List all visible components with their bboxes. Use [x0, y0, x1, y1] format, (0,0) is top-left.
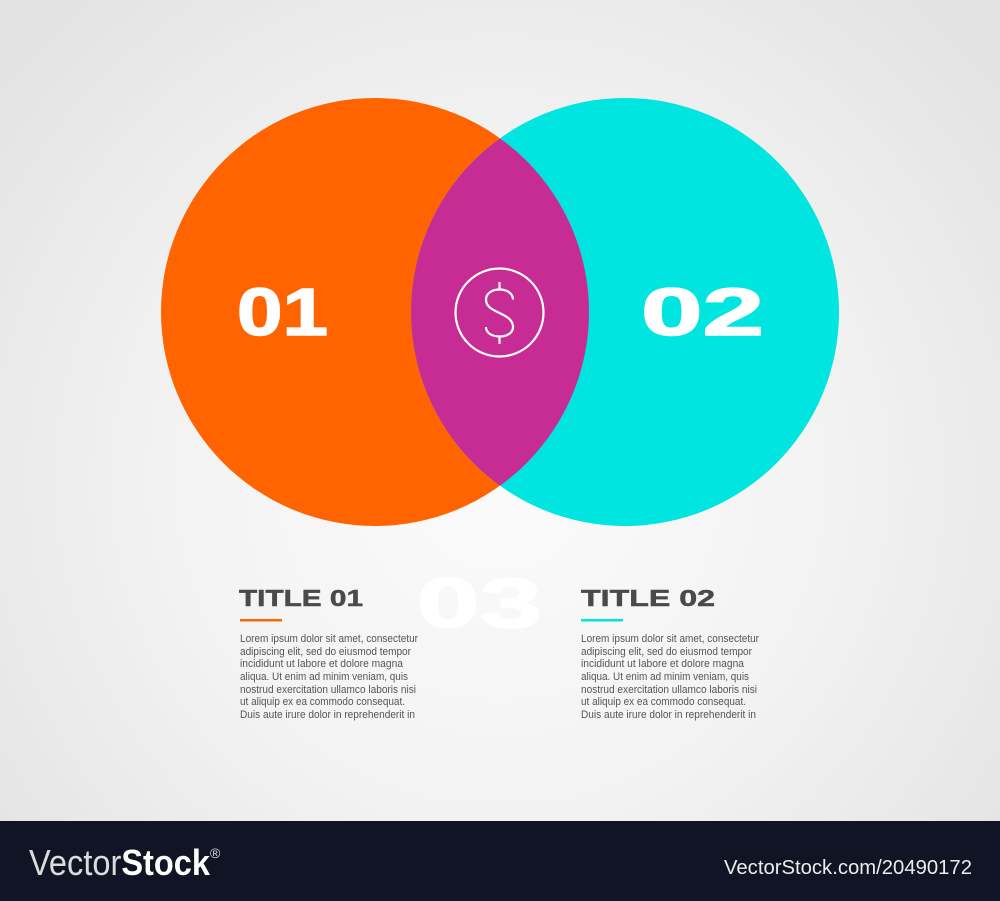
body text 02: Duis aute irure dolor in reprehenderit in	[581, 709, 756, 721]
heading: title 01: TITLE 01	[239, 585, 363, 611]
body text 01: ut aliquip ex ea commodo consequat.	[240, 696, 405, 708]
body text 01: adipiscing elit, sed do eiusmod tempor	[240, 646, 411, 658]
body text 02: aliqua. Ut enim ad minim veniam, quis	[581, 671, 749, 683]
body text 02: incididunt ut labore et dolore magna	[581, 658, 745, 670]
heading: title 02: TITLE 02	[581, 585, 715, 611]
circle 01	[161, 98, 589, 526]
number 03 watermark: 03	[417, 564, 542, 642]
body text 02: Lorem ipsum dolor sit amet, consectetur	[581, 633, 759, 645]
registered mark: ®	[210, 845, 221, 861]
body text 01: Duis aute irure dolor in reprehenderit in	[240, 709, 415, 721]
body text 01: aliqua. Ut enim ad minim veniam, quis	[240, 671, 408, 683]
body text 01: Lorem ipsum dolor sit amet, consectetur	[240, 633, 418, 645]
icon: dollar coin	[456, 268, 544, 356]
venn diagram	[161, 98, 839, 526]
accent line orange	[240, 619, 282, 622]
overlap region	[411, 138, 589, 486]
body text 01: incididunt ut labore et dolore magna	[240, 658, 404, 670]
body text 02	[581, 633, 759, 721]
number 02: 02	[641, 275, 764, 350]
number 01: 01	[237, 275, 328, 350]
body text 02: ut aliquip ex ea commodo consequat.	[581, 696, 746, 708]
text block 02	[581, 585, 759, 721]
text block 01	[239, 585, 418, 721]
accent line cyan	[581, 619, 623, 622]
image id: VectorStock.com/20490172	[724, 857, 972, 879]
body text 01	[240, 633, 418, 721]
circle 02	[411, 98, 839, 526]
body text 01: nostrud exercitation ullamco laboris nisi	[240, 684, 416, 696]
logo: VectorStock	[29, 842, 211, 883]
body text 02: adipiscing elit, sed do eiusmod tempor	[581, 646, 752, 658]
body text 02: nostrud exercitation ullamco laboris nisi	[581, 684, 757, 696]
footer banner	[0, 821, 1000, 901]
